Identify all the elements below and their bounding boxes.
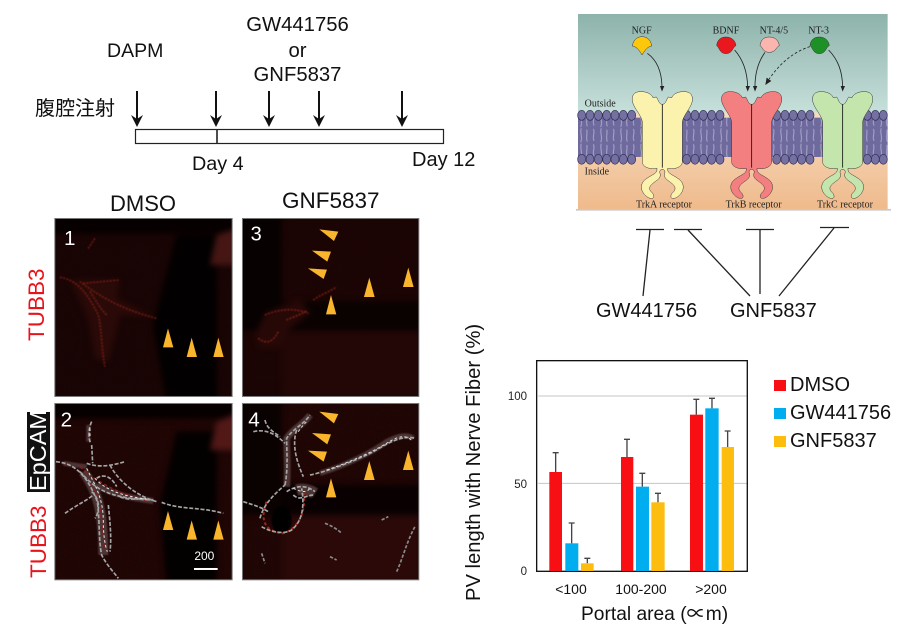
- panel number 2: 2: [61, 409, 72, 432]
- row label: EpCAM and TUBB3: EpCAM: [25, 410, 51, 491]
- category labels: >200: [695, 581, 727, 597]
- membrane side labels: Inside: [585, 167, 610, 178]
- bottom edge line: [576, 209, 891, 211]
- legend: GW441756: GW441756: [790, 402, 891, 424]
- y-axis tick labels: 0: [521, 566, 527, 578]
- receptor: TrkB: [721, 92, 782, 198]
- label: Day 4: Day 4: [192, 153, 244, 175]
- timeline bar: [136, 129, 444, 144]
- label: GW441756: GW441756: [596, 300, 697, 322]
- panel 2: TUBB3 and EpCAM DMSO micrograph: [50, 400, 237, 585]
- label: GW441756 or GNF5837: [246, 14, 349, 86]
- membrane bilayer: [578, 110, 888, 164]
- ligand labels: NGF: [632, 25, 652, 36]
- receptor labels: TrkC receptor: [817, 200, 874, 211]
- label: GNF5837: GNF5837: [730, 300, 817, 322]
- bars: DMSO: [549, 415, 703, 571]
- ligand labels: NT-4/5: [760, 25, 788, 36]
- ligand labels: NT-3: [808, 25, 829, 36]
- bar chart: PV length with nerve fiber: [463, 324, 747, 625]
- arrowheads: [163, 328, 224, 357]
- panel number 4: 4: [248, 409, 260, 432]
- diagram: Trk receptors in the cell membrane: [576, 14, 891, 211]
- ligand labels: [632, 25, 829, 36]
- timeline: DAPM and inhibitor injection schedule: [35, 14, 475, 175]
- legend: [774, 374, 891, 452]
- category labels: 100-200: [615, 581, 667, 597]
- receptor: TrkA: [632, 92, 692, 198]
- receptor labels: TrkB receptor: [726, 200, 782, 211]
- legend: DMSO: DMSO: [790, 374, 850, 396]
- panel 1: TUBB3 DMSO micrograph: [50, 215, 237, 402]
- category labels: <100: [555, 581, 587, 597]
- row label: EpCAM and TUBB3: TUBB3: [26, 505, 51, 578]
- error bars: [553, 398, 731, 563]
- ligand labels: BDNF: [713, 25, 740, 36]
- legend: GNF5837: GNF5837: [790, 430, 877, 452]
- panel number 3: 3: [251, 224, 262, 246]
- scale bar: 200: 200: [194, 549, 215, 563]
- y-axis tick labels: 100: [508, 391, 527, 403]
- bars: GNF5837: [581, 447, 734, 571]
- row label: EpCAM and TUBB3: [25, 410, 51, 578]
- membrane side labels: [585, 98, 616, 178]
- label: GW441756 or GNF5837: GW441756: [246, 14, 349, 36]
- scale bar: 200: [194, 549, 218, 570]
- arrowheads: [163, 511, 224, 540]
- label: Day 12: Day 12: [412, 149, 475, 171]
- category labels: [555, 581, 727, 597]
- column heading: GNF5837: GNF5837: [282, 188, 380, 213]
- label: intraperitoneal injection: 腹腔注射: [35, 97, 115, 120]
- membrane side labels: Outside: [585, 98, 616, 109]
- y-axis tick labels: 50: [514, 479, 527, 491]
- panel number 1: 1: [64, 227, 75, 250]
- inhibition lines from drugs to receptors: [636, 228, 849, 296]
- column heading: DMSO: DMSO: [110, 191, 176, 216]
- bars: GW441756: [565, 408, 719, 571]
- ligands: [632, 37, 829, 55]
- plot frame and gridlines: [537, 361, 747, 571]
- arrowheads: [308, 229, 414, 314]
- label: GW441756 or GNF5837: or: [288, 40, 307, 62]
- panel 4: TUBB3 and EpCAM GNF5837 micrograph: [237, 400, 422, 582]
- y-axis tick labels: [508, 391, 527, 578]
- label: DAPM: DAPM: [107, 40, 163, 62]
- ligand-to-receptor arrows: [647, 47, 845, 92]
- label: GW441756 or GNF5837: GNF5837: [254, 64, 341, 86]
- receptor: TrkC: [812, 92, 873, 198]
- panel 3: TUBB3 GNF5837 micrograph: [237, 215, 422, 398]
- x-axis title: Portal area (∝m): [581, 604, 728, 625]
- receptor labels: [636, 200, 874, 211]
- row label: TUBB3: TUBB3: [24, 268, 49, 341]
- receptor labels: TrkA receptor: [636, 200, 693, 211]
- injection arrows: [131, 91, 408, 127]
- arrowheads: [308, 412, 414, 497]
- y-axis title: PV length with Nerve Fiber (%): [463, 324, 485, 601]
